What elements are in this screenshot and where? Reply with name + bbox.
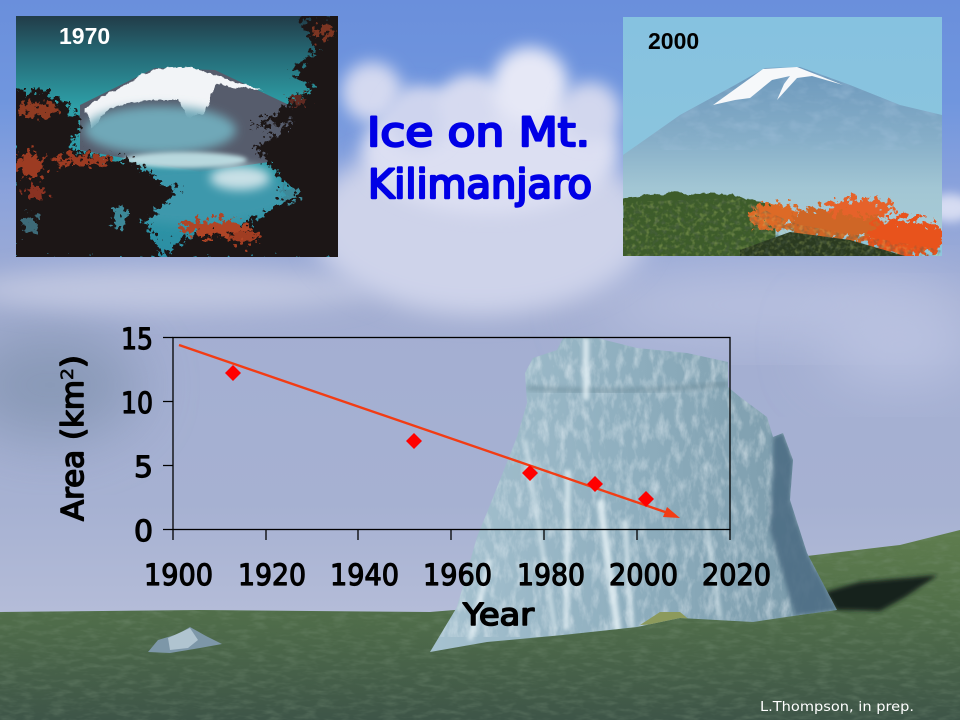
- y axis numbers: 5: [134, 450, 153, 484]
- label: 1970: 1970: [59, 23, 110, 49]
- x axis numbers: 1940: [330, 558, 399, 592]
- title: [367, 110, 592, 208]
- credit: L.Thompson, in prep.: [760, 700, 914, 715]
- shadow of the ice block: [825, 575, 938, 611]
- label: 2000: 2000: [648, 28, 699, 54]
- photo: Kilimanjaro 2000: [623, 17, 945, 262]
- y axis numbers: 0: [134, 514, 153, 548]
- y axis numbers: [121, 322, 153, 548]
- data points: [225, 365, 654, 507]
- x axis numbers: 1960: [423, 558, 492, 592]
- x axis numbers: 2000: [609, 558, 678, 592]
- photo: Kilimanjaro 1970: [10, 10, 345, 262]
- x axis numbers: 1980: [517, 558, 585, 592]
- x axis title: Year: [462, 598, 535, 633]
- ground: green moorland: [0, 530, 960, 720]
- y axis numbers: 10: [121, 386, 153, 420]
- plot frame and ticks: [163, 338, 730, 540]
- x axis numbers: [144, 558, 771, 592]
- y axis title: 2: [58, 368, 78, 380]
- ice block glacier remnant: [430, 337, 840, 652]
- title: Ice on Mt.: [367, 110, 590, 156]
- y axis numbers: 15: [121, 322, 153, 356]
- y axis title: Area (km: [56, 380, 91, 521]
- x axis numbers: 1920: [238, 558, 306, 592]
- small ice remnant: [148, 627, 222, 653]
- title: Kilimanjaro: [368, 162, 592, 208]
- x axis numbers: 2020: [702, 558, 771, 592]
- trend line with arrow: [179, 345, 680, 518]
- chart: ice area versus year: [56, 322, 771, 633]
- x axis numbers: 1900: [144, 558, 213, 592]
- y axis title: ): [56, 355, 91, 368]
